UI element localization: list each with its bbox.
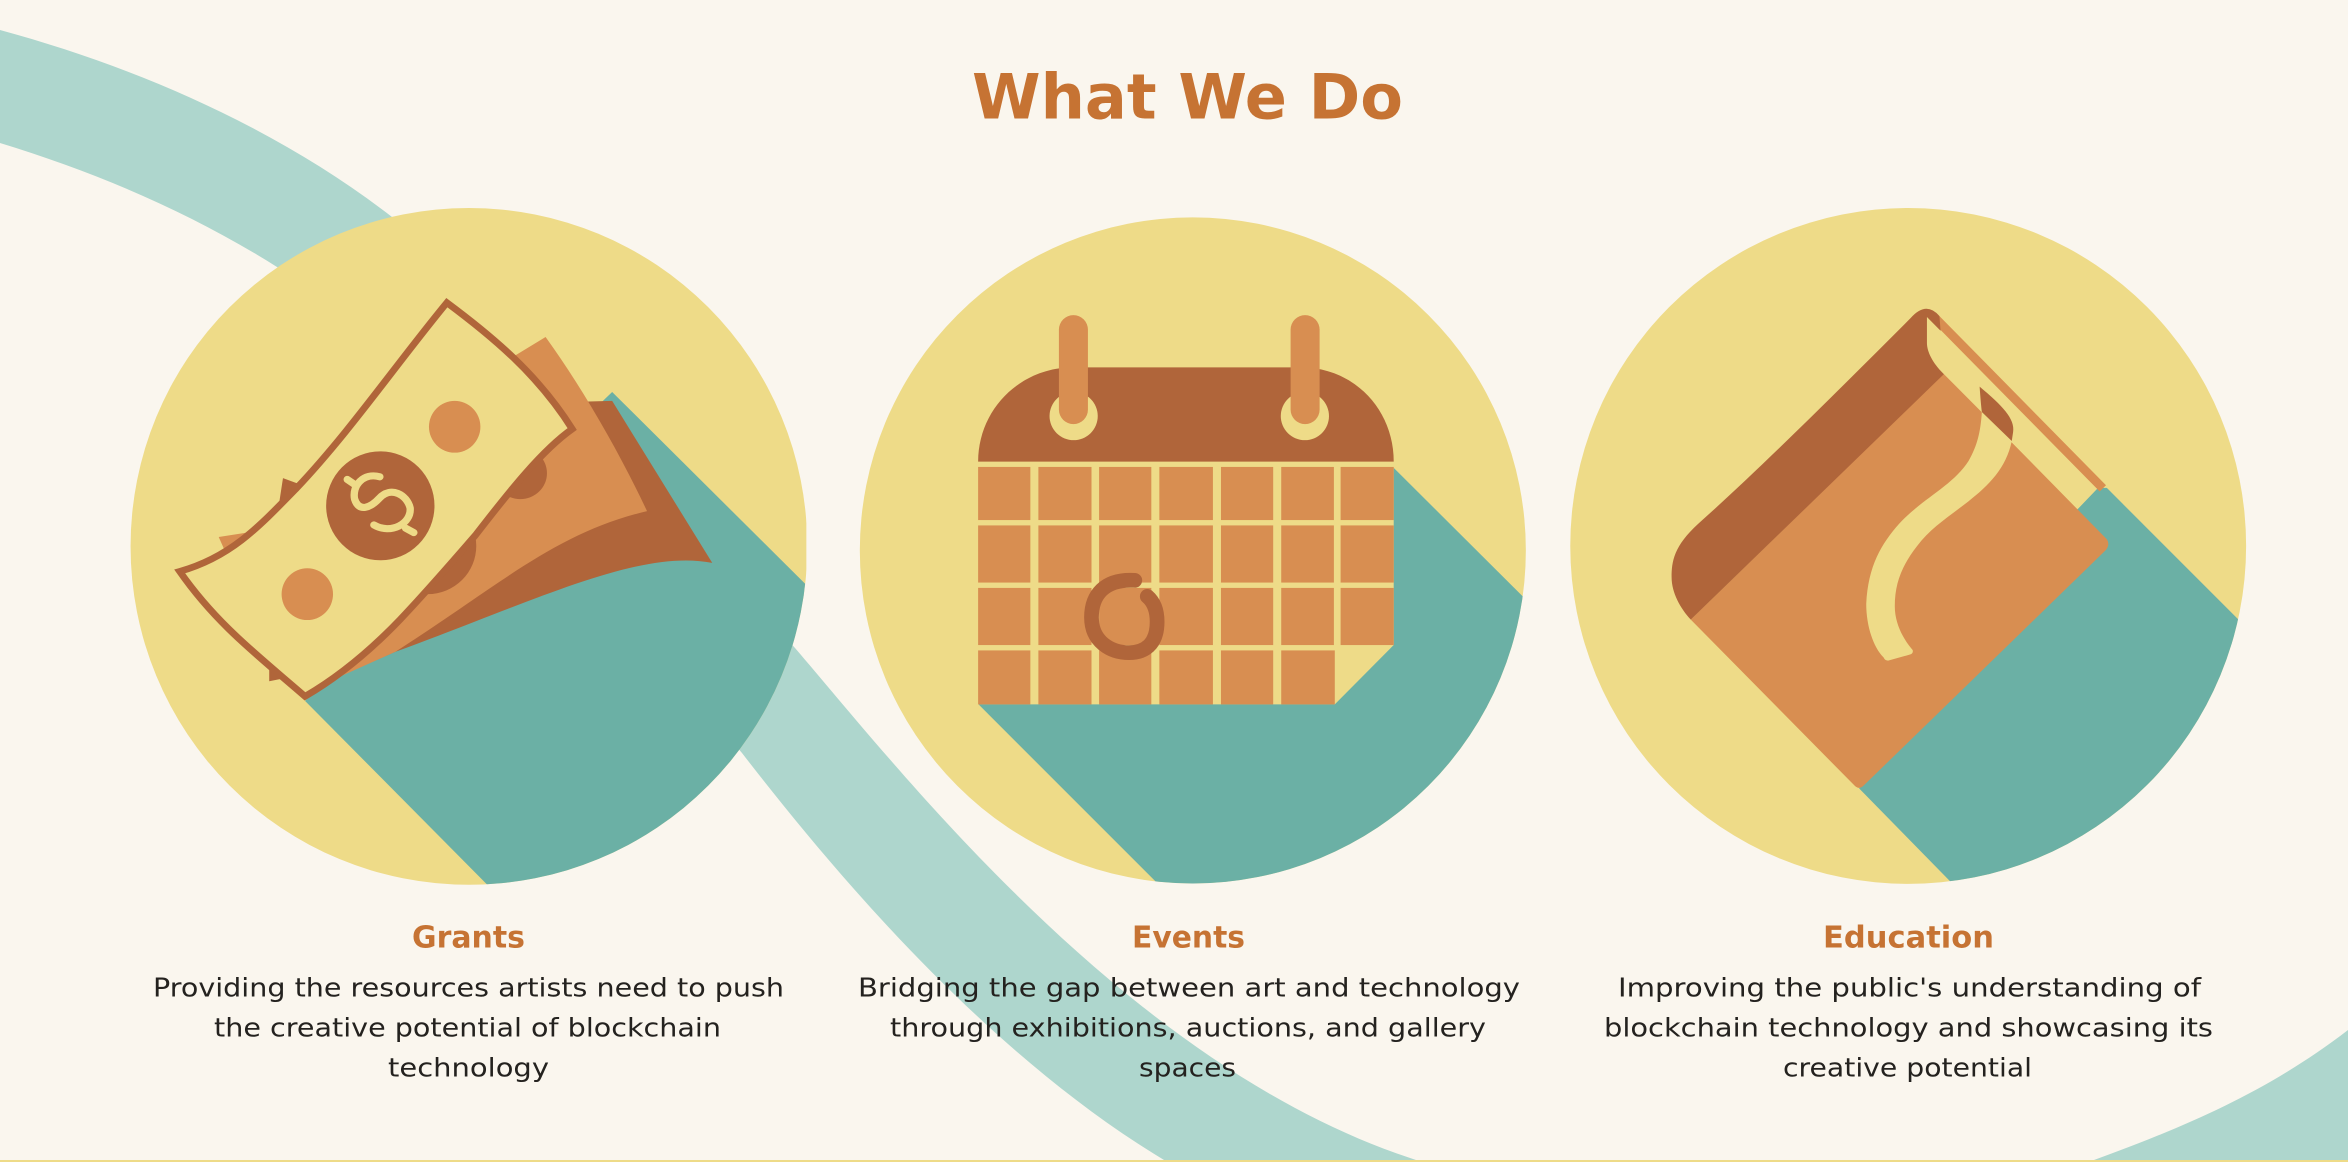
text block: education description bbox=[1604, 974, 2213, 1084]
icon: calendar in circle bbox=[860, 217, 1526, 884]
icon: banknotes in circle bbox=[130, 208, 806, 885]
text block: events description: Bridging the gap between art and technology bbox=[858, 974, 1520, 1004]
heading: Grants: Grants bbox=[412, 920, 525, 956]
panel: education bbox=[1570, 208, 2246, 1082]
icon: book in circle bbox=[1570, 208, 2246, 884]
text block: events description: spaces bbox=[1139, 1054, 1236, 1084]
icon: dollar sign bbox=[347, 476, 414, 533]
text block: events description: through exhibitions, auctions, and gallery bbox=[890, 1014, 1486, 1044]
background ribbon: sweeping band bbox=[0, 30, 1416, 1160]
text block: education description: creative potential bbox=[1783, 1054, 2032, 1084]
text block: grants description: Providing the resources artists need to push bbox=[153, 974, 784, 1004]
icon: hand-drawn circle mark bbox=[1092, 580, 1157, 653]
text block: grants description: technology bbox=[388, 1054, 549, 1084]
text block: grants description bbox=[153, 974, 784, 1084]
heading: Events: Events bbox=[1132, 920, 1245, 956]
text block: education description: blockchain technology and showcasing its bbox=[1604, 1014, 2213, 1044]
title: What We Do bbox=[972, 60, 1403, 134]
panel: events bbox=[860, 217, 1526, 1082]
bottom edge line bbox=[0, 1160, 2348, 1162]
text block: education description: Improving the public's understanding of bbox=[1618, 974, 2202, 1004]
text block: grants description: the creative potential of blockchain bbox=[214, 1014, 721, 1044]
panel: grants bbox=[130, 208, 806, 1082]
icon: bookmark ribbon bbox=[1866, 412, 2012, 661]
heading: Education: Education bbox=[1823, 920, 1994, 956]
calendar grid bbox=[978, 467, 1394, 704]
text block: events description bbox=[858, 974, 1520, 1084]
background ribbon: bottom right corner bbox=[2094, 1030, 2348, 1162]
